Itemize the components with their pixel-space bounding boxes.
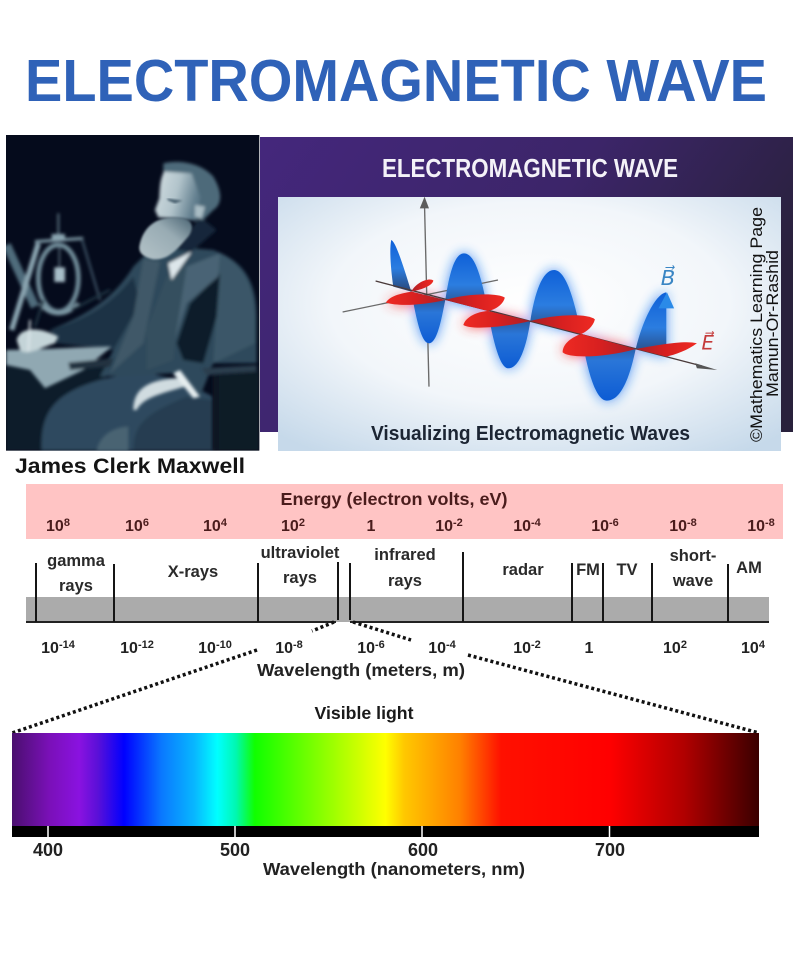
electric field wave xyxy=(386,280,697,357)
wavelength values: -12 xyxy=(138,639,154,651)
panel: electromagnetic wave banner xyxy=(260,137,793,451)
chair xyxy=(202,365,257,375)
wavelength values: 10 xyxy=(741,640,759,657)
energy values xyxy=(46,517,775,535)
wavelength values: -2 xyxy=(531,639,541,651)
wavelength values xyxy=(41,639,766,657)
energy values: 4 xyxy=(221,517,228,529)
energy values: 1 xyxy=(367,518,376,535)
colour spectrum bar xyxy=(12,733,759,826)
hand on knee xyxy=(133,378,190,410)
spectrum region labels: FM xyxy=(576,561,600,579)
energy values: 8 xyxy=(64,517,70,529)
wavelength values: -10 xyxy=(216,639,232,651)
energy band xyxy=(26,484,783,539)
desk and paper xyxy=(6,347,112,388)
wavelength values: 10 xyxy=(120,640,138,657)
black scale bar xyxy=(12,826,759,837)
energy values: 2 xyxy=(299,517,305,529)
wave caption: Visualizing Electromagnetic Waves xyxy=(371,423,690,445)
energy values: 10 xyxy=(747,518,765,535)
energy values: -2 xyxy=(453,517,463,529)
wavelength values: -4 xyxy=(446,639,457,651)
spectrum region labels: ultraviolet xyxy=(261,544,340,562)
magnetic field wave xyxy=(390,240,666,401)
spectrum region labels: rays xyxy=(388,572,422,590)
energy values: 10 xyxy=(669,518,687,535)
nanometer values: 500 xyxy=(220,840,250,860)
nanometer values: 400 xyxy=(33,840,63,860)
wavelength values: 1 xyxy=(585,640,594,657)
wavelength axis title: Wavelength (meters, m) xyxy=(257,660,465,680)
energy values: 6 xyxy=(143,517,149,529)
label: B: B⃗ xyxy=(661,265,675,290)
nanometer values: 600 xyxy=(408,840,438,860)
vertical axis xyxy=(425,207,429,387)
instrument xyxy=(7,213,110,330)
nanometer values xyxy=(33,840,625,860)
grey spectrum band xyxy=(26,597,769,622)
spectrum region labels: short- xyxy=(670,547,716,565)
energy values: 10 xyxy=(125,518,143,535)
wavelength values: 10 xyxy=(41,640,59,657)
spectrum region labels: infrared xyxy=(374,546,436,564)
spectrum region labels: radar xyxy=(502,561,544,579)
wavelength values: 4 xyxy=(759,639,766,651)
energy values: 10 xyxy=(513,518,531,535)
panel: visible light spectrum xyxy=(12,703,759,879)
spectrum region labels: wave xyxy=(672,572,713,590)
banner heading: ELECTROMAGNETIC WAVE xyxy=(382,153,678,183)
energy values: 10 xyxy=(281,518,299,535)
spectrum region labels: TV xyxy=(616,561,638,579)
spectrum region labels: X-rays xyxy=(168,563,218,581)
energy values: 10 xyxy=(46,518,64,535)
spectrum region labels xyxy=(47,544,762,595)
horizontal back axis xyxy=(343,280,498,312)
propagation axis xyxy=(376,281,702,366)
energy values: 10 xyxy=(203,518,221,535)
wavelength values: 10 xyxy=(663,640,681,657)
energy values: 10 xyxy=(435,518,453,535)
author line: Mamun-Or-Rashid xyxy=(763,250,782,397)
diagram: electromagnetic wave xyxy=(343,197,717,401)
wavelength values: 10 xyxy=(357,640,375,657)
wavelength values: 10 xyxy=(198,640,216,657)
wavelength values: 2 xyxy=(681,639,687,651)
nanometer values: 700 xyxy=(595,840,625,860)
portrait of James Clerk Maxwell xyxy=(6,135,259,451)
spectrum region labels: rays xyxy=(283,569,317,587)
B vector arrow xyxy=(658,292,674,308)
head xyxy=(177,217,217,252)
energy axis title: Energy (electron volts, eV) xyxy=(280,489,508,509)
wavelength values: -14 xyxy=(59,639,76,651)
spectrum region labels: rays xyxy=(59,577,93,595)
portrait caption: James Clerk Maxwell xyxy=(15,455,245,478)
wavelength values: 10 xyxy=(428,640,446,657)
wavelength values: 10 xyxy=(275,640,293,657)
energy values: -8 xyxy=(765,517,775,529)
energy values: -4 xyxy=(531,517,542,529)
label: E: E⃗ xyxy=(702,331,715,354)
energy values: 10 xyxy=(591,518,609,535)
figure xyxy=(42,370,213,451)
spectrum region labels: AM xyxy=(736,559,762,577)
panel: electromagnetic spectrum chart xyxy=(26,484,783,680)
wave illustration panel xyxy=(278,197,781,451)
spectrum region labels: gamma xyxy=(47,552,106,570)
wavelength values: 10 xyxy=(513,640,531,657)
visible light heading: Visible light xyxy=(314,703,414,723)
zoom lines to visible light xyxy=(12,622,759,733)
energy values: -8 xyxy=(687,517,697,529)
nanometer axis title: Wavelength (nanometers, nm) xyxy=(263,859,525,879)
wavelength values: -8 xyxy=(293,639,303,651)
wavelength values: -6 xyxy=(375,639,385,651)
title: ELECTROMAGNETIC WAVE xyxy=(25,48,767,114)
credit line: ©Mathematics Learning Page xyxy=(747,207,766,442)
energy values: -6 xyxy=(609,517,619,529)
